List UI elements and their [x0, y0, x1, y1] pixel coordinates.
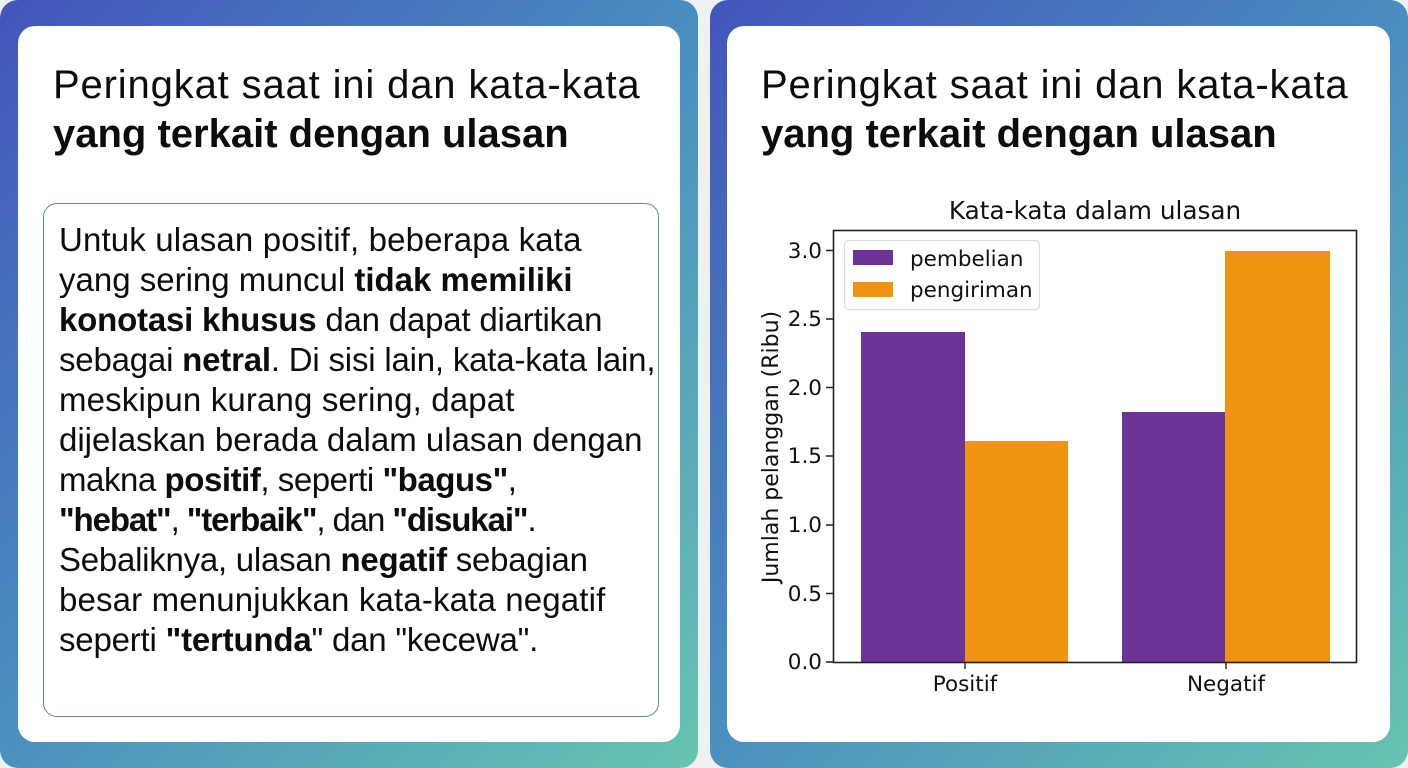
- panel: chart: [710, 0, 1408, 768]
- text block: review words explanation: sebagai netral. Di sisi lain, kata-kata lain,: [59, 341, 655, 378]
- y axis label: Jumlah pelanggan (Ribu): [759, 311, 784, 585]
- y axis ticks and labels: 2.0: [788, 376, 822, 401]
- heading: left title: [53, 63, 641, 156]
- heading: right title: [761, 63, 1349, 156]
- text block: review words explanation: makna positif, seperti "bagus",: [59, 461, 516, 498]
- text block: review words explanation: dijelaskan berada dalam ulasan dengan: [59, 421, 642, 458]
- card: chart panel: [727, 26, 1390, 742]
- card: text panel: [18, 26, 680, 742]
- y axis ticks and labels: 0.0: [788, 650, 822, 675]
- x axis ticks and labels: Negatif: [1187, 672, 1265, 697]
- text block: review words explanation: "hebat", "terbaik", dan "disukai".: [59, 501, 536, 538]
- chart title: Kata-kata dalam ulasan: [949, 196, 1241, 225]
- y axis ticks and labels: 1.5: [788, 444, 822, 469]
- panel: text explanation: [0, 0, 698, 768]
- text block: review words explanation: seperti "tertunda" dan "kecewa".: [59, 621, 538, 658]
- bars: Negatif: [1122, 251, 1330, 662]
- y axis ticks and labels: 1.0: [788, 513, 822, 538]
- x axis ticks and labels: Positif: [933, 672, 998, 697]
- y axis ticks and labels: 2.5: [788, 307, 822, 332]
- y axis ticks and labels: 3.0: [788, 239, 822, 264]
- heading: right title: Peringkat saat ini dan kata-kata: [761, 63, 1349, 107]
- text block: review words explanation: Sebaliknya, ulasan negatif sebagian: [59, 541, 588, 578]
- text block: review words explanation: meskipun kurang sering, dapat: [59, 381, 515, 418]
- y axis ticks and labels: [788, 239, 833, 675]
- text block: review words explanation: besar menunjukkan kata-kata negatif: [59, 581, 605, 618]
- bars: Positif: [861, 332, 1068, 662]
- plot frame: [834, 230, 1356, 662]
- text block: review words explanation: [43, 203, 659, 717]
- legend: [844, 240, 1040, 310]
- legend: pembelian: [910, 247, 1023, 272]
- y axis ticks and labels: 0.5: [788, 582, 822, 607]
- text block: review words explanation: yang sering muncul tidak memiliki: [59, 261, 573, 298]
- legend: pengiriman: [910, 278, 1033, 303]
- text block: review words explanation: konotasi khusus dan dapat diartikan: [59, 301, 602, 338]
- heading: right title: yang terkait dengan ulasan: [761, 112, 1277, 156]
- x axis ticks and labels: [933, 662, 1265, 697]
- heading: left title: Peringkat saat ini dan kata-kata: [53, 63, 641, 107]
- heading: left title: yang terkait dengan ulasan: [53, 112, 569, 156]
- text block: review words explanation: Untuk ulasan positif, beberapa kata: [59, 221, 582, 258]
- bar chart: words in reviews: [759, 196, 1358, 697]
